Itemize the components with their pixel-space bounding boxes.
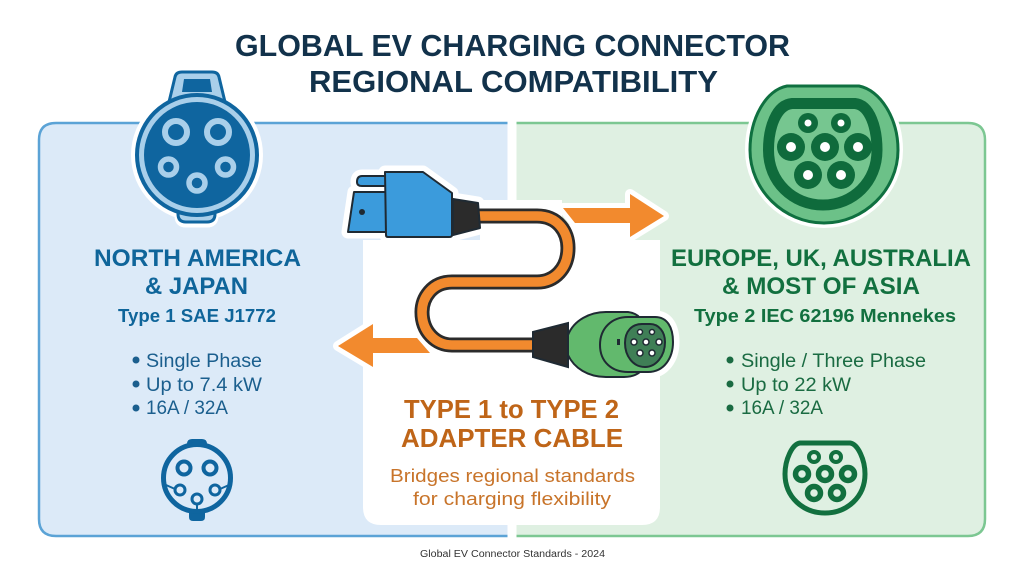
icon: type 2 small bbox=[785, 443, 865, 513]
text: type 2 specs: 16A / 32A bbox=[741, 398, 823, 419]
text: type 2 label: Type 2 IEC 62196 Mennekes bbox=[694, 306, 956, 326]
text: adapter heading: ADAPTER CABLE bbox=[401, 423, 623, 453]
arrow: left bbox=[338, 324, 430, 367]
icon: type 1 connector large bbox=[131, 71, 263, 224]
text: europe heading: EUROPE, UK, AUSTRALIA bbox=[671, 245, 971, 272]
panel: north america bbox=[39, 123, 512, 536]
text: adapter heading: TYPE 1 to TYPE 2 bbox=[404, 394, 619, 424]
text: adapter heading bbox=[401, 394, 623, 453]
icon: type 1 small bbox=[164, 439, 230, 521]
icon: type 2 connector large bbox=[750, 86, 898, 223]
text: north america heading: NORTH AMERICA bbox=[94, 245, 301, 272]
text: type 1 specs: 16A / 32A bbox=[146, 398, 228, 419]
text: type 1 label: Type 1 SAE J1772 bbox=[118, 306, 276, 326]
text: europe heading bbox=[671, 245, 971, 300]
text: type 1 specs: Single Phase bbox=[146, 351, 262, 372]
arrow: right bbox=[563, 194, 664, 237]
panel: europe bbox=[512, 123, 985, 536]
text: adapter description: for charging flexibility bbox=[413, 489, 611, 509]
text: adapter description bbox=[390, 466, 635, 509]
text: type 1 specs: Up to 7.4 kW bbox=[146, 375, 262, 396]
text: type 2 specs: Up to 22 kW bbox=[741, 375, 851, 396]
title: GLOBAL EV CHARGING CONNECTOR bbox=[235, 28, 790, 63]
text: north america heading bbox=[94, 245, 301, 300]
title: REGIONAL COMPATIBILITY bbox=[309, 64, 718, 99]
text: type 2 specs: Single / Three Phase bbox=[741, 351, 926, 372]
footer: Global EV Connector Standards - 2024 bbox=[420, 549, 605, 560]
text: type 1 specs bbox=[132, 351, 262, 419]
cable bbox=[422, 216, 568, 345]
text: north america heading: & JAPAN bbox=[145, 273, 248, 300]
text: type 2 specs bbox=[726, 351, 926, 419]
text: europe heading: & MOST OF ASIA bbox=[722, 273, 920, 300]
type 2 plug bbox=[533, 312, 673, 377]
adapter cable illustration bbox=[348, 172, 673, 377]
type 1 plug bbox=[348, 172, 480, 237]
title bbox=[235, 28, 790, 99]
text: adapter description: Bridges regional standards bbox=[390, 466, 635, 486]
plug halo bbox=[348, 172, 673, 372]
panel: white centre bbox=[363, 120, 660, 540]
